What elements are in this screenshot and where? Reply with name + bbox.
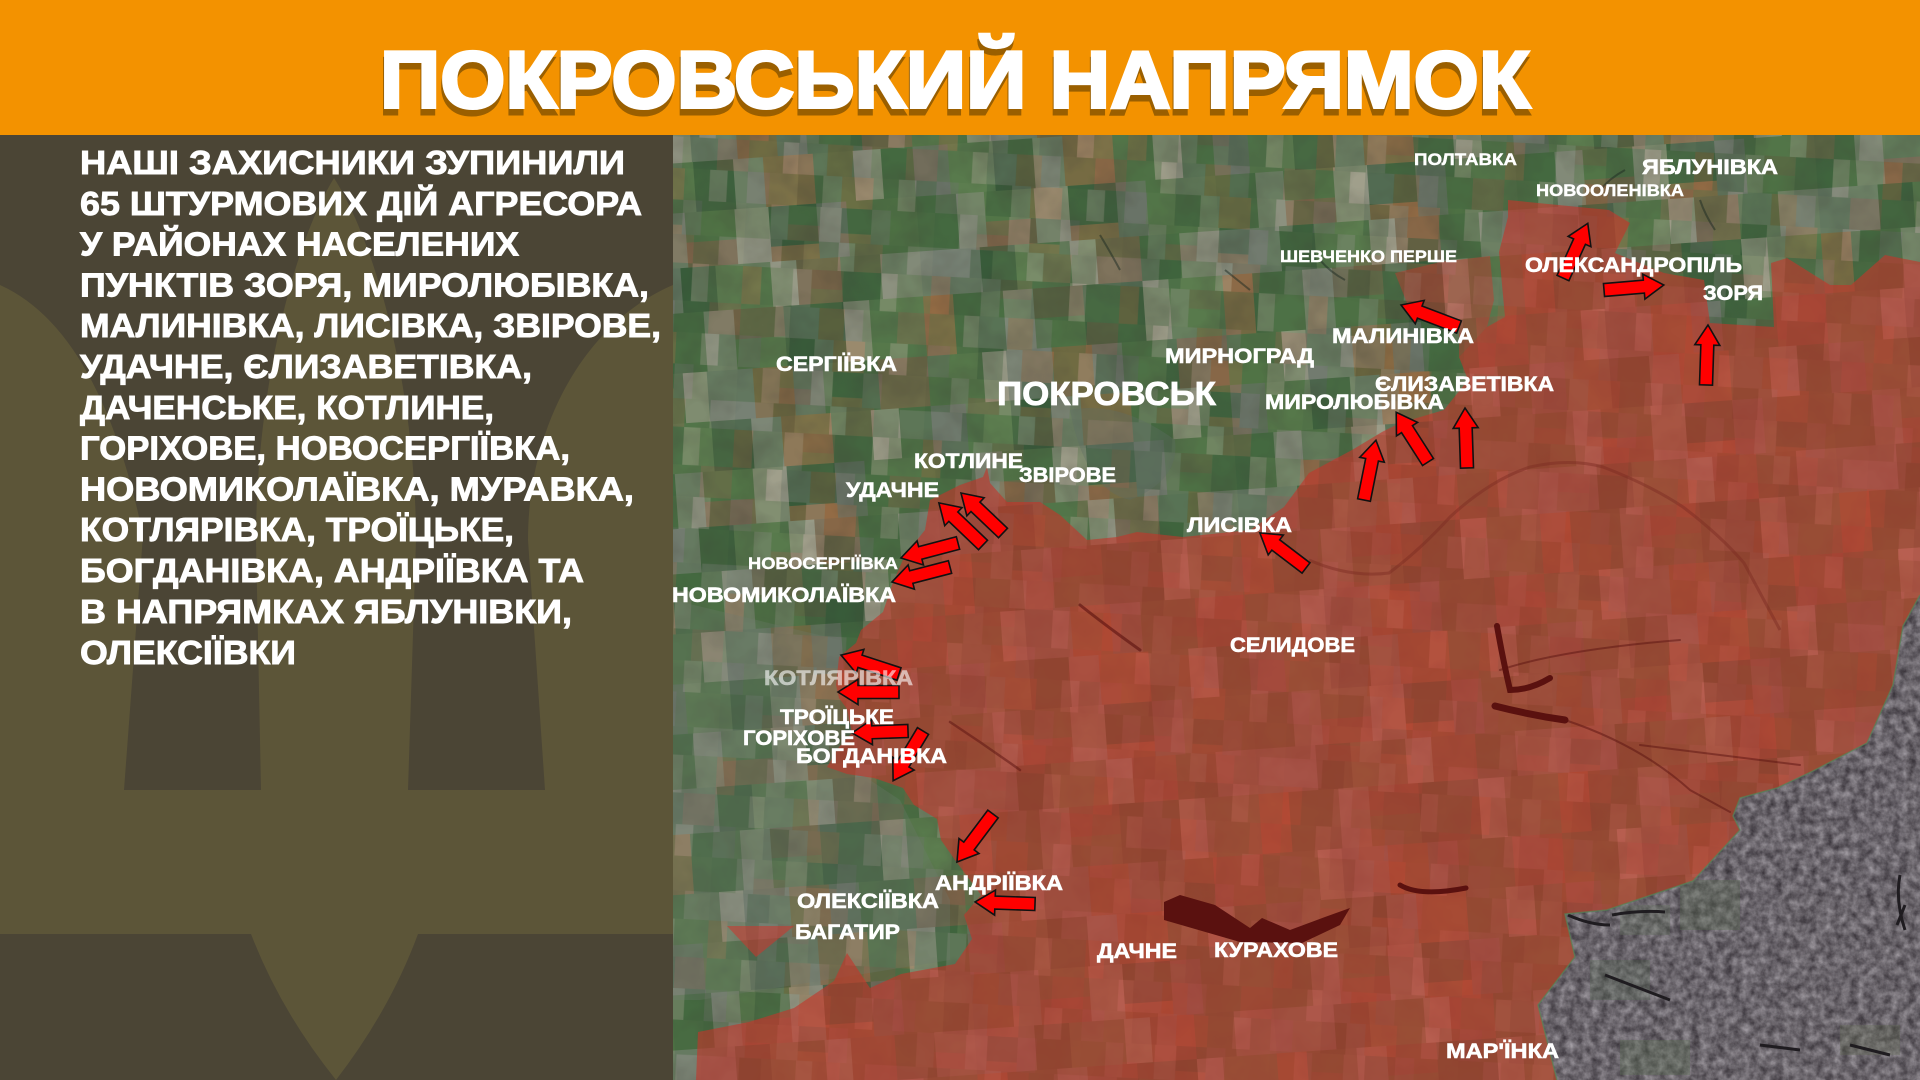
- label: Мар'їнка: МАР'ЇНКА: [1446, 1039, 1559, 1063]
- text block: summary: УДАЧНЕ, ЄЛИЗАВЕТІВКА,: [80, 349, 532, 386]
- label: Троїцьке: ТРОЇЦЬКЕ: [780, 705, 894, 729]
- arrow: [852, 719, 908, 745]
- label: Сергіївка: СЕРГІЇВКА: [776, 352, 897, 376]
- label: Єлизаветівка: ЄЛИЗАВЕТІВКА: [1375, 372, 1554, 396]
- road arc: [1309, 462, 1780, 630]
- text block: summary: ПУНКТІВ ЗОРЯ, МИРОЛЮБІВКА,: [80, 267, 649, 304]
- arrow: [1694, 325, 1720, 385]
- text block: summary: 65 ШТУРМОВИХ ДІЙ АГРЕСОРА: [80, 184, 642, 223]
- arrow: [975, 889, 1035, 916]
- area: occupied territory: [696, 200, 1920, 1080]
- label: Миролюбівка: МИРОЛЮБІВКА: [1265, 390, 1444, 414]
- text block: summary: КОТЛЯРІВКА, ТРОЇЦЬКЕ,: [80, 512, 514, 549]
- text block: summary: У РАЙОНАХ НАСЕЛЕНИХ: [80, 225, 519, 264]
- text block: summary: ОЛЕКСІЇВКИ: [80, 635, 296, 672]
- label: Зоря: ЗОРЯ: [1703, 281, 1763, 305]
- text block: summary: ДАЧЕНСЬКЕ, КОТЛИНЕ,: [80, 390, 494, 427]
- dark streams: [1100, 170, 1715, 290]
- label: Новооленівка: НОВООЛЕНІВКА: [1536, 181, 1684, 200]
- arrow: [898, 531, 961, 570]
- label: Дачне: ДАЧНЕ: [1097, 939, 1177, 963]
- label: Андріївка: АНДРІЇВКА: [935, 871, 1063, 895]
- label: Мирноград: МИРНОГРАД: [1165, 344, 1314, 368]
- rivers: [950, 605, 1800, 892]
- label: Котлине: КОТЛИНЕ: [914, 449, 1023, 473]
- label: Селидове: СЕЛИДОВЕ: [1230, 633, 1355, 657]
- arrow: [882, 725, 934, 787]
- arrow: [952, 484, 1012, 542]
- area: faded front wedge north: [1395, 256, 1494, 357]
- label: Яблунівка: ЯБЛУНІВКА: [1642, 155, 1778, 179]
- boundary edge by city: [1538, 595, 1920, 1080]
- label: Курахове: КУРАХОВЕ: [1214, 938, 1338, 962]
- header bar: [0, 0, 1920, 135]
- label: Олександропіль: ОЛЕКСАНДРОПІЛЬ: [1525, 253, 1742, 277]
- arrow: [1603, 273, 1665, 302]
- text block: summary: МАЛИНІВКА, ЛИСІВКА, ЗВІРОВЕ,: [80, 308, 661, 345]
- label: Новомиколаївка: НОВОМИКОЛАЇВКА: [672, 583, 896, 607]
- arrows: attack directions: [837, 218, 1720, 916]
- arrow: [1397, 293, 1463, 339]
- grey-green lowlands west: [673, 600, 950, 1000]
- arrow: [1552, 218, 1599, 283]
- label: Котлярівка: КОТЛЯРІВКА: [764, 666, 913, 690]
- label: Багатир: БАГАТИР: [795, 920, 900, 944]
- label: Горіхове: ГОРІХОВЕ: [743, 726, 855, 750]
- panel: satellite map: [673, 135, 1920, 1080]
- arrow: [889, 555, 953, 594]
- neutral tint: [673, 135, 1920, 1080]
- label: Полтавка: ПОЛТАВКА: [1414, 150, 1517, 169]
- arrow: [947, 806, 1003, 869]
- Pokrovsk town: [1070, 408, 1175, 500]
- arrow: [1252, 523, 1314, 578]
- map labels: [672, 150, 1778, 1063]
- title: ПОКРОВСЬКИЙ НАПРЯМОК: [379, 40, 1530, 132]
- grey city area: [1530, 590, 1920, 1080]
- text block: summary: ГОРІХОВЕ, НОВОСЕРГІЇВКА,: [80, 431, 570, 468]
- panel: left text panel: [0, 135, 673, 1080]
- text block: summary: НОВОМИКОЛАЇВКА, МУРАВКА,: [80, 471, 634, 508]
- label: Богданівка: БОГДАНІВКА: [796, 744, 947, 768]
- label: Лисівка: ЛИСІВКА: [1187, 513, 1292, 537]
- lake: Kurakhove reservoir: [1164, 895, 1350, 943]
- title: ПОКРОВСЬКИЙ НАПРЯМОК: [380, 34, 1531, 126]
- arrow: [1386, 406, 1439, 469]
- text block: summary: В НАПРЯМКАХ ЯБЛУНІВКИ,: [80, 594, 572, 631]
- arrow: [837, 643, 903, 686]
- label: Удачне: УДАЧНЕ: [846, 478, 939, 502]
- label: Малинівка: МАЛИНІВКА: [1332, 324, 1474, 348]
- label: Покровськ: ПОКРОВСЬК: [997, 376, 1217, 413]
- label: Новосергіївка: НОВОСЕРГІЇВКА: [748, 554, 898, 573]
- text block: summary: [80, 145, 661, 672]
- label: Шевченко Перше: ШЕВЧЕНКО ПЕРШЕ: [1280, 247, 1457, 266]
- arrow: [838, 680, 899, 704]
- label: Олексіївка: ОЛЕКСІЇВКА: [797, 889, 939, 913]
- arrow: [1352, 438, 1388, 502]
- text block: summary: НАШІ ЗАХИСНИКИ ЗУПИНИЛИ: [80, 145, 625, 182]
- label: Звірове: ЗВІРОВЕ: [1019, 463, 1116, 487]
- icon: trident watermark: [0, 178, 673, 1080]
- arrow: [1453, 408, 1479, 468]
- area: faded wedge near Bagatyr: [727, 926, 794, 957]
- text block: summary: БОГДАНІВКА, АНДРІЇВКА ТА: [80, 553, 584, 590]
- arrow: [930, 494, 992, 554]
